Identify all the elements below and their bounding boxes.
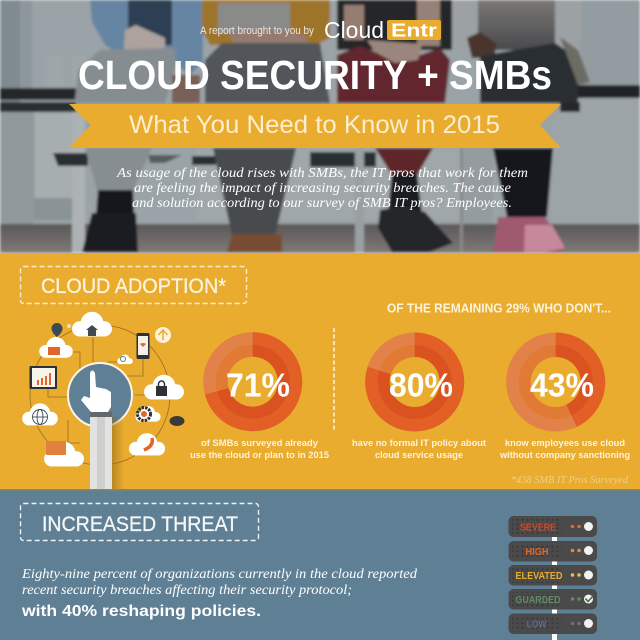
donut: 43%: 43% (530, 366, 594, 404)
caption: 71% (190, 438, 330, 461)
caption: 80% (352, 438, 487, 461)
icon: tablet chart (30, 366, 57, 389)
icon: up arrow badge (155, 327, 171, 343)
caption: 43%: know employees use cloud (505, 438, 625, 449)
threat level meter (508, 516, 597, 640)
icon: globe cloud (22, 403, 58, 425)
wall (19, 0, 640, 226)
divider (333, 328, 335, 432)
person 1 (90, 0, 203, 75)
intro paragraph (116, 166, 528, 211)
level: guarded: GUARDED (516, 594, 561, 606)
person 3 (337, 0, 452, 50)
icon: cloud network illustration (22, 312, 185, 489)
icon: chat bubble (170, 416, 184, 426)
person 4 (452, 0, 582, 50)
icon: gear cloud (135, 406, 161, 422)
caption: 80%: cloud service usage (375, 450, 463, 461)
label: remaining 29%: OF THE REMAINING 29% WHO DON'T... (387, 302, 611, 316)
stools (47, 55, 63, 89)
level: severe: SEVERE (520, 522, 556, 534)
icon: message cloud (44, 441, 84, 466)
panel: increased threat (0, 490, 640, 640)
caption: 71%: use the cloud or plan to in 2015 (190, 450, 330, 461)
floor (0, 224, 640, 253)
hero sponsor line (200, 17, 441, 43)
level: elevated: ELEVATED (516, 570, 563, 582)
main title: CLOUD SECURITY + SMBs (78, 52, 552, 98)
intro paragraph: As usage of the cloud rises with SMBs, the IT pros that work for them (116, 166, 528, 181)
bench (0, 88, 76, 100)
caption: 71%: of SMBs surveyed already (201, 438, 319, 449)
donut: 43% (506, 332, 605, 432)
subtitle ribbon (69, 104, 561, 148)
donut: 71%: 71% (226, 366, 290, 404)
donut: 71% (203, 332, 302, 431)
icon: pointing hand (68, 363, 132, 489)
icon: at-sign bubble (117, 354, 133, 364)
caption: 80%: have no formal IT policy about (352, 438, 487, 449)
hero sponsor line: Cloud (324, 17, 384, 43)
hero photo background (0, 0, 640, 253)
footnote: *438 SMB IT Pros Surveyed (511, 475, 629, 486)
icon: map pin (52, 323, 62, 337)
caption: 43%: without company sanctioning (499, 450, 630, 461)
icon: lock cloud (144, 375, 184, 399)
heading: cloud adoption: CLOUD ADOPTION* (41, 275, 226, 298)
icon: mail cloud (39, 337, 73, 358)
level: low: LOW (526, 618, 547, 630)
intro paragraph: and solution according to our survey of SMB IT pros? Employees. (132, 196, 512, 211)
person 2 (202, 0, 330, 45)
threat paragraph: with 40% reshaping policies. (21, 603, 261, 620)
donut: 80%: 80% (389, 366, 453, 404)
intro paragraph: are feeling the impact of increasing security breaches. The cause (134, 181, 511, 196)
hero sponsor line: Entr (391, 20, 437, 40)
heading: increased threat (20, 504, 258, 540)
caption: 43% (499, 438, 630, 461)
icon: phone (136, 333, 150, 359)
heading: increased threat: INCREASED THREAT (42, 513, 238, 536)
hero sponsor line: A report brought to you by (200, 25, 314, 37)
threat paragraph: recent security breaches affecting their security protocol; (22, 583, 352, 598)
icon: telephone cloud (129, 433, 165, 455)
level: high: HIGH (526, 546, 548, 558)
threat paragraph: Eighty-nine percent of organizations currently in the cloud reported (21, 567, 418, 582)
threat paragraph (21, 567, 418, 620)
subtitle ribbon: What You Need to Know in 2015 (129, 111, 500, 139)
panel: cloud adoption (0, 253, 640, 490)
donut: 80% (365, 332, 464, 432)
heading: cloud adoption (20, 266, 246, 304)
icon: home cloud (72, 312, 112, 336)
